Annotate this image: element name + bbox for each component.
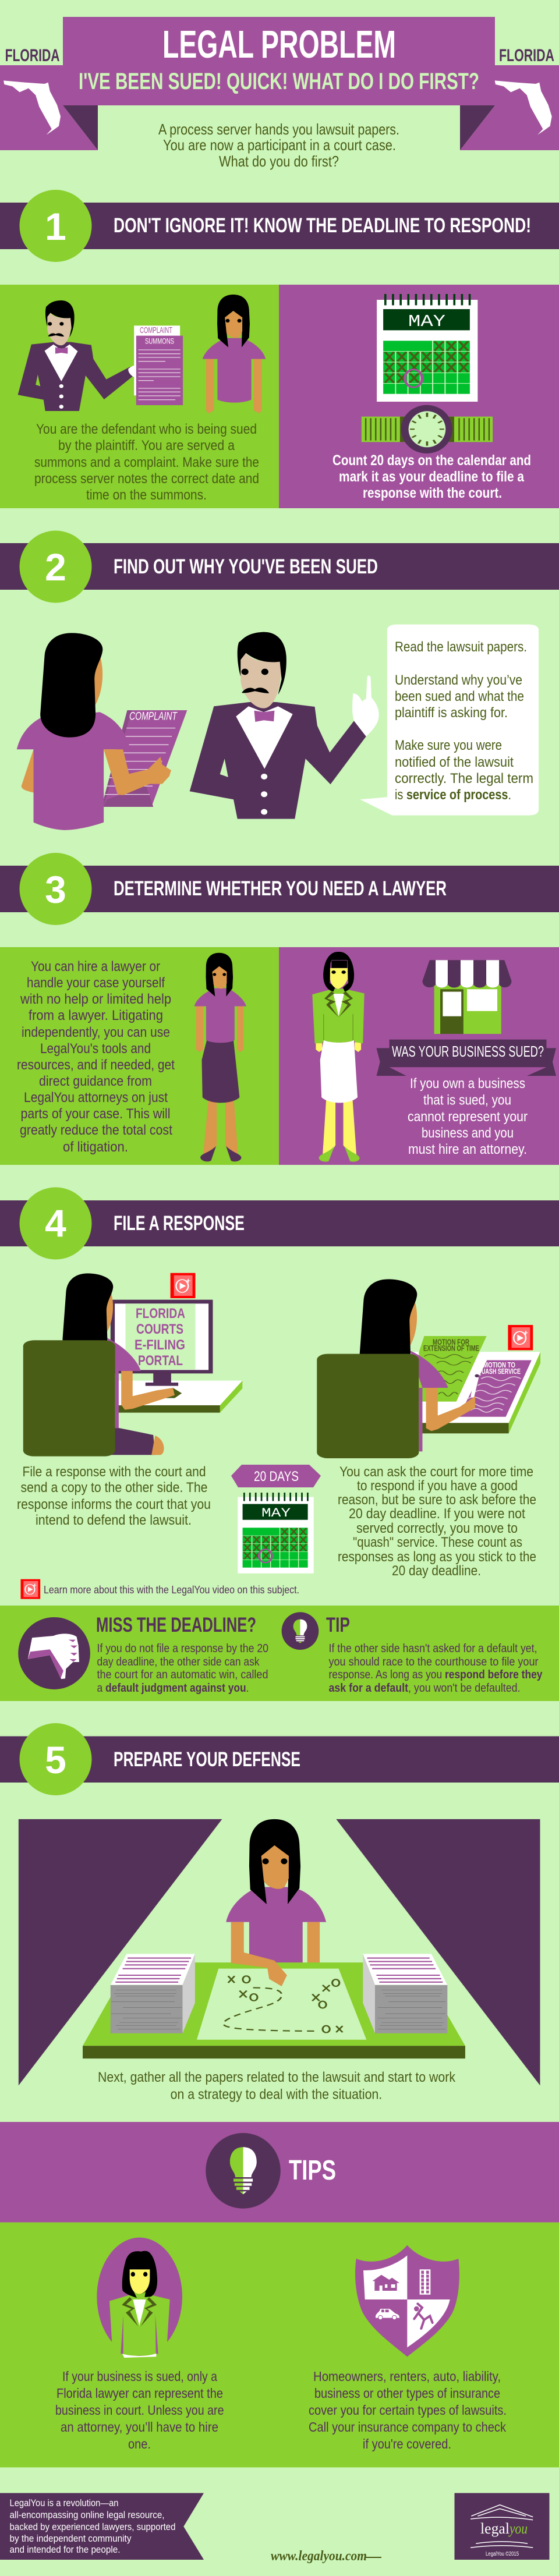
icon: video play [171, 1273, 195, 1298]
illustration: woman at e-filing portal [23, 1273, 242, 1457]
banner ribbon [0, 17, 559, 150]
step 5 heading: 5 [45, 1738, 66, 1781]
text: motion for extension: MOTION FOR [433, 1337, 469, 1347]
text: hiring options: LegalYou attorneys on just [24, 1090, 168, 1105]
video note: Learn more about this with the LegalYou video on this subject. [44, 1584, 299, 1596]
text: Florida Courts e-filing portal: FLORIDA [136, 1306, 185, 1321]
text: insurance coverage [309, 2369, 507, 2451]
text: hiring options: LegalYou's tools and [40, 1041, 151, 1057]
panel: hire a lawyer or self-help [0, 947, 279, 1165]
icon: storefront [422, 960, 512, 1034]
step 2 heading [0, 531, 559, 603]
figure: pointing hand [231, 1950, 287, 1986]
figure: woman in skirt [194, 953, 246, 1161]
callout: speech bubble: Read the lawsuit papers. [395, 639, 527, 655]
callout: speech bubble: Make sure you were [395, 738, 502, 753]
text: default warning [97, 1642, 268, 1695]
icon: video play [508, 1325, 533, 1350]
table [83, 1962, 465, 2058]
logo: LegalYou: you [508, 2520, 528, 2537]
callout: speech bubble: is service of process. [395, 787, 511, 803]
icon: calendar [377, 294, 477, 402]
callout: speech bubble: correctly. The legal term [395, 771, 533, 786]
text: defendant explanation [34, 421, 259, 503]
text: motion to quash: QUASH SERVICE [477, 1367, 521, 1376]
text: ask for more time: to respond if you have a good [357, 1478, 518, 1494]
illustration: process server [18, 300, 140, 411]
step 3 heading: 3 [45, 868, 66, 911]
desk and motion papers [321, 1336, 540, 1433]
text: hiring options: You can hire a lawyer or [31, 959, 160, 975]
title text: LEGAL PROBLEM [162, 23, 396, 66]
text: tip: you should race to the courthouse to file your [328, 1656, 539, 1668]
step 4 heading: FILE A RESPONSE [114, 1212, 245, 1235]
step 4 heading: 4 [45, 1202, 66, 1245]
callout: 20 days: 20 DAYS [254, 1469, 299, 1484]
footer ribbon: about LegalYou: backed by experienced lawyers, supported [9, 2521, 176, 2532]
text: default warning: the court for an automatic win, called [97, 1668, 268, 1681]
text: ask for more time: You can ask the court for more time [339, 1464, 533, 1480]
text: motion to quash [477, 1360, 521, 1376]
text: tip: response. As long as you respond before they [328, 1668, 543, 1681]
text: hiring options: direct guidance from [39, 1073, 152, 1089]
text: default warning: If you do not file a response by the 20 [97, 1642, 268, 1655]
text: hiring options: of litigation. [63, 1139, 128, 1155]
text: ask for more time: 20 day deadline. If you were not [349, 1506, 525, 1522]
icon: light bulb [282, 1612, 319, 1650]
icon: wristwatch [362, 405, 493, 453]
text: gather papers: on a strategy to deal with the situation. [171, 2087, 382, 2103]
intro text: What do you do first? [219, 153, 339, 170]
figure: woman seated from behind [23, 1273, 175, 1457]
text: hiring options [17, 959, 175, 1155]
panel: served with summons [0, 285, 279, 508]
text: business representation: an attorney, you’ll have to hire [61, 2419, 218, 2435]
text: Florida Courts e-filing portal [135, 1306, 185, 1369]
text: count 20 days [332, 452, 531, 501]
callout: speech bubble [360, 625, 539, 816]
icon: business lawyer portrait [97, 2238, 182, 2358]
text: hiring options: handle your case yourself [27, 975, 165, 991]
website address: www.legalyou.com [271, 2549, 367, 2564]
step 2 heading: 2 [45, 545, 66, 589]
illustration: defendant [203, 295, 266, 413]
panel: tips content [0, 2223, 559, 2467]
icon: small calendar: MAY [261, 1506, 291, 1521]
text: tip: If the other side hasn't asked for a default yet, [328, 1642, 537, 1655]
left paper stack [111, 1954, 195, 2033]
text: defendant explanation: time on the summons. [86, 487, 207, 503]
illustration: woman writing motions [317, 1279, 540, 1458]
logo: LegalYou [454, 2493, 550, 2560]
strategy map [197, 1969, 366, 2040]
text: hiring options: from a lawyer. Litigating [29, 1008, 163, 1023]
icon: light bulb [206, 2133, 281, 2209]
text: Florida Courts e-filing portal: PORTAL [138, 1353, 183, 1369]
text: default warning: a default judgment against you. [97, 1682, 249, 1695]
icon: Florida map right [495, 80, 552, 135]
text: gather papers [98, 2070, 456, 2103]
text: Florida Courts e-filing portal: COURTS [136, 1321, 183, 1337]
text: hiring options: greatly reduce the total cost [20, 1122, 172, 1138]
text: hiring options: parts of your case. This will [21, 1106, 170, 1122]
document: complaint [101, 710, 187, 807]
text: defendant explanation: process server notes the correct date and [34, 471, 259, 487]
title banner [0, 17, 559, 150]
text: Florida Courts e-filing portal: E-FILING [135, 1337, 185, 1353]
document: complaint and summons [134, 325, 183, 405]
text: business representation [55, 2369, 224, 2451]
step 3 heading: DETERMINE WHETHER YOU NEED A LAWYER [114, 877, 447, 900]
text: default warning: day deadline, the other side can ask [97, 1656, 260, 1668]
logo: LegalYou: legal [480, 2520, 510, 2537]
text: file a response: intend to defend the lawsuit. [36, 1512, 192, 1528]
text: insurance coverage: Homeowners, renters, auto, liability, [313, 2369, 501, 2384]
text: ask for more time: served correctly, you move to [356, 1521, 518, 1536]
icon: insurance shield [355, 2245, 459, 2357]
intro text: You are now a participant in a court case. [163, 136, 396, 154]
step 2 heading: FIND OUT WHY YOU'VE BEEN SUED [114, 555, 378, 578]
text: insurance coverage: if you're covered. [363, 2436, 451, 2451]
icon: Florida map left [3, 80, 61, 135]
text: business representation: Florida lawyer can represent the [56, 2386, 223, 2401]
text: defendant explanation: summons and a complaint. Make sure the [34, 455, 259, 470]
text: insurance coverage: Call your insurance company to check [309, 2419, 506, 2435]
text: business representation: If your business is sued, only a [62, 2369, 217, 2384]
text: tip [328, 1642, 543, 1695]
footer ribbon: about LegalYou: LegalYou is a revolution—an [9, 2497, 119, 2508]
document: complaint and summons: COMPLAINT [140, 325, 172, 335]
illustration: defendant reads complaint [17, 632, 379, 830]
heading: tip: TIP [326, 1614, 350, 1636]
text: file a response: File a response with the court and [22, 1464, 206, 1480]
heading: miss the deadline: MISS THE DEADLINE? [96, 1614, 256, 1636]
figure: lawyer [190, 632, 379, 819]
footer ribbon: about LegalYou: and intended for the people. [9, 2544, 120, 2555]
text: hiring options: with no help or limited help [20, 991, 171, 1007]
panel: tips heading [0, 2122, 559, 2223]
right paper stack [363, 1954, 447, 2033]
step 4 heading [0, 1188, 559, 1260]
callout: speech bubble: plaintiff is asking for. [395, 705, 508, 721]
text: hiring options: independently, you can use [22, 1025, 170, 1040]
step 1 heading: 1 [45, 205, 66, 248]
text: business owners [408, 1076, 528, 1157]
intro text: A process server hands you lawsuit papers. [158, 121, 399, 138]
label: Florida left: FLORIDA [5, 46, 60, 65]
callout: speech bubble: Understand why you’ve [395, 672, 522, 688]
callout: speech bubble: been sued and what the [395, 689, 524, 704]
text: ask for more time [338, 1464, 536, 1579]
illustration: preparing strategy at table [19, 1819, 540, 2085]
text: file a response: response informs the court that you [17, 1497, 211, 1512]
text: business representation: one. [128, 2436, 151, 2451]
text: insurance coverage: cover you for certain types of lawsuits. [309, 2403, 507, 2418]
banner: was your business sued [376, 1040, 556, 1076]
text: motion to quash: MOTION TO [483, 1360, 515, 1369]
monitor and desk [111, 1300, 242, 1413]
callout: 20 days [231, 1465, 321, 1487]
footer ribbon: about LegalYou: by the independent community [9, 2533, 132, 2544]
text: file a response: send a copy to the other side. The [21, 1480, 207, 1496]
panel: count 20 days [279, 285, 559, 508]
text: business owners: If you own a business [410, 1076, 525, 1092]
icon: small calendar [238, 1493, 314, 1574]
icon: calendar: MAY [408, 312, 445, 331]
text: gather papers: Next, gather all the papers related to the lawsuit and start to work [98, 2070, 456, 2085]
panel: miss the deadline and tip [0, 1606, 559, 1701]
text: hiring options: resources, and if needed, get [17, 1057, 175, 1073]
text: tip: ask for a default, you won't be defaulted. [328, 1682, 521, 1695]
text: file a response [17, 1464, 211, 1528]
icon: thumbs down [18, 1617, 90, 1689]
figure: woman [226, 1819, 326, 1964]
callout: speech bubble: notified of the lawsuit [395, 754, 514, 770]
text: ask for more time: "quash" service. These count as [353, 1535, 522, 1550]
intro text [158, 121, 399, 170]
step 1 heading [0, 190, 559, 262]
text: business owners: business and you [422, 1125, 514, 1141]
panel: was your business sued [279, 947, 559, 1165]
text: count 20 days: mark it as your deadline to file a [339, 469, 525, 485]
text: count 20 days: response with the court. [363, 485, 502, 501]
spotlight: right wall [336, 1819, 540, 2085]
text: motion for extension: EXTENSION OF TIME [423, 1344, 479, 1353]
document: complaint and summons: SUMMONS [145, 336, 174, 346]
figure: businesswoman [312, 952, 365, 1162]
text: insurance coverage: business or other types of insurance [314, 2386, 500, 2401]
footer ribbon: about LegalYou: all-encompassing online legal resource, [9, 2510, 164, 2521]
heading: tips: TIPS [289, 2155, 336, 2186]
logo: LegalYou: LegalYou ©2015 [486, 2551, 519, 2557]
footer ribbon: about LegalYou [0, 2493, 204, 2560]
text: defendant explanation: by the plaintiff. You are served a [58, 438, 235, 453]
step 3 heading [0, 853, 559, 925]
figure: woman from behind [17, 633, 171, 830]
text: ask for more time: 20 day deadline. [392, 1563, 481, 1579]
text: business owners: cannot represent your [408, 1109, 528, 1125]
text: defendant explanation: You are the defendant who is being sued [36, 421, 257, 437]
video note [21, 1579, 299, 1599]
step 5 heading: PREPARE YOUR DEFENSE [114, 1748, 300, 1771]
text: business representation: business in court. Unless you are [55, 2403, 224, 2418]
document: complaint: COMPLAINT [129, 711, 178, 723]
spotlight: left wall [19, 1819, 222, 2085]
text: motion for extension [423, 1337, 479, 1353]
step 5 heading [0, 1723, 559, 1795]
text: business owners: must hire an attorney. [408, 1142, 527, 1157]
figure: woman writing from behind [317, 1279, 479, 1458]
text: business owners: that is sued, you [423, 1092, 511, 1108]
